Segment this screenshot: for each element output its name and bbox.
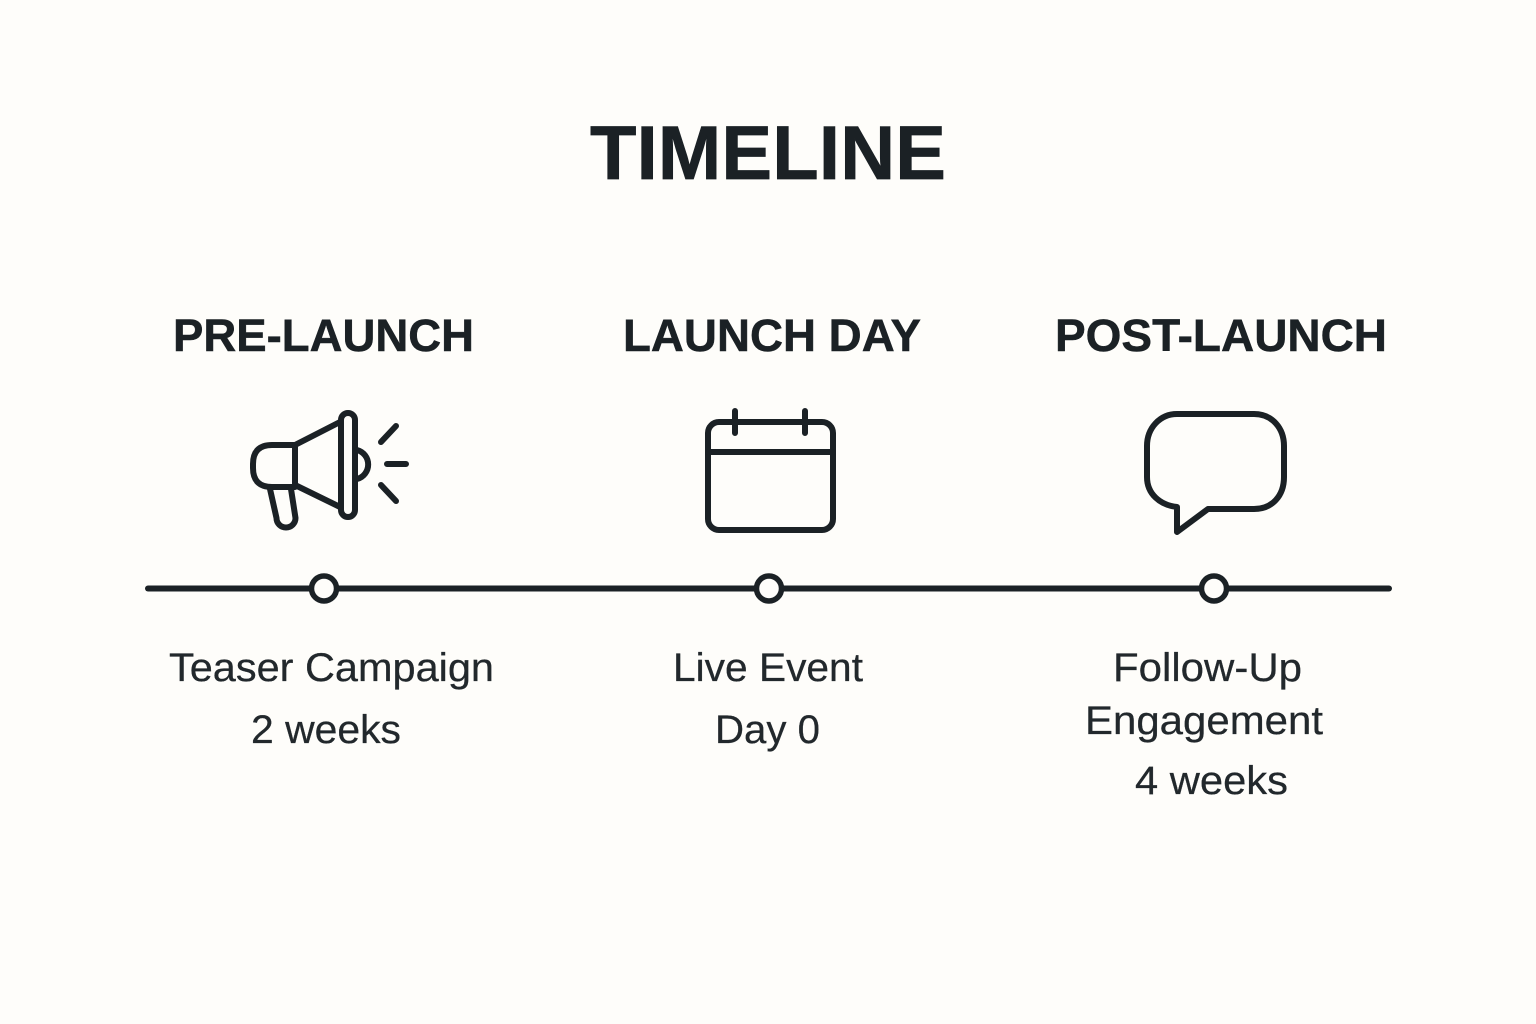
icon: speech bubble (1147, 414, 1284, 532)
text: day 0: Day 0 (715, 708, 820, 752)
marker: launch day (756, 576, 782, 601)
icon: calendar (708, 411, 833, 530)
text: follow-up: Follow-Up (1113, 646, 1302, 690)
text: live event: Live Event (673, 646, 863, 690)
icon: megaphone (253, 413, 406, 528)
marker: post-launch (1202, 576, 1226, 601)
text: engagement: Engagement (1085, 699, 1323, 743)
title: TIMELINE (590, 111, 946, 196)
text: 4 weeks: 4 weeks (1135, 759, 1288, 803)
column: post-launch (1055, 310, 1387, 803)
text: 2 weeks: 2 weeks (251, 708, 401, 752)
column: launch day (623, 310, 921, 752)
marker: pre-launch (312, 576, 336, 601)
text: teaser campaign: Teaser Campaign (169, 646, 494, 690)
timeline axis (148, 576, 1389, 601)
heading: post-launch: POST-LAUNCH (1055, 310, 1387, 361)
heading: launch day: LAUNCH DAY (623, 310, 921, 361)
heading: pre-launch: PRE-LAUNCH (173, 310, 474, 361)
column: pre-launch (169, 310, 494, 752)
